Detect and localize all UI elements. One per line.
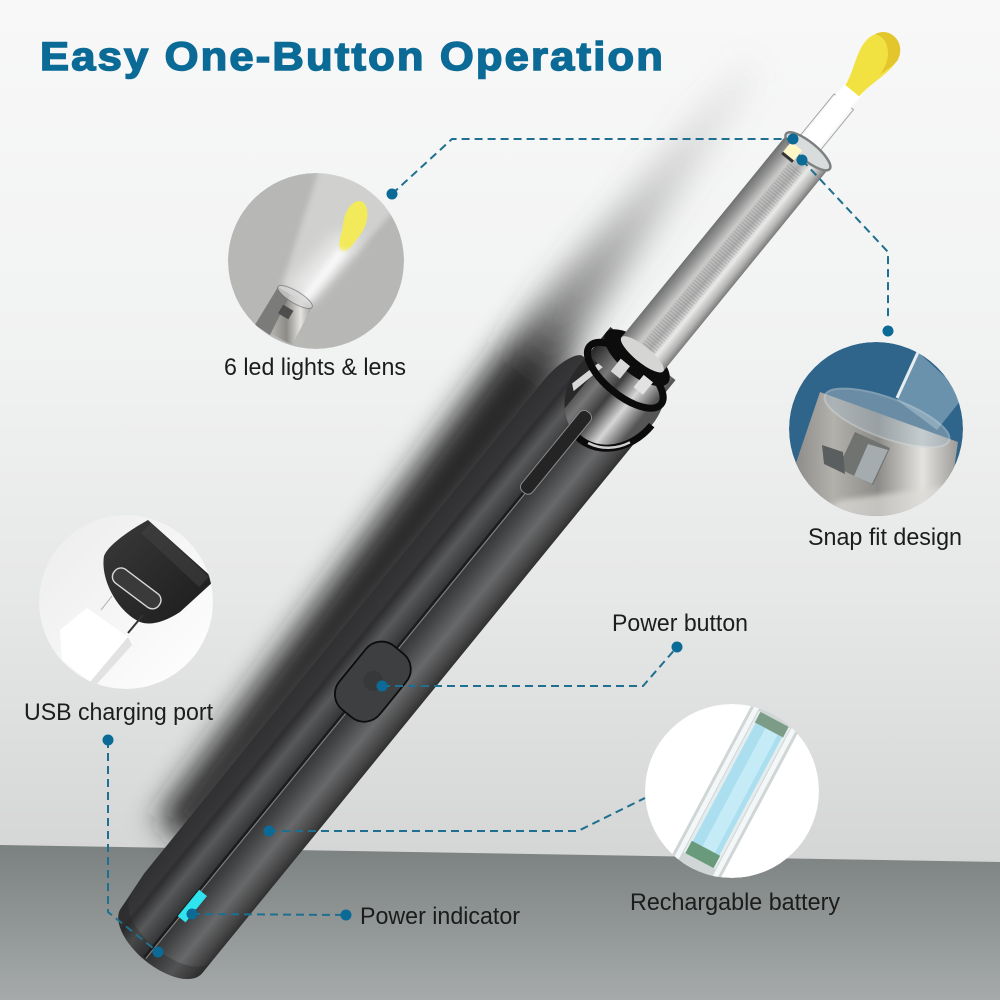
- circle: snap fit detail: [789, 342, 963, 516]
- callout: rechargeable battery: [264, 698, 840, 916]
- label: Rechargable battery: [630, 889, 840, 916]
- leader line: [376, 642, 682, 692]
- leader line: [386, 134, 798, 200]
- label: Power indicator: [360, 903, 520, 930]
- device: ear pick pen: [118, 32, 900, 979]
- callout: USB charging port: [24, 515, 215, 958]
- metal tube: [616, 127, 835, 378]
- label: 6 led lights & lens: [224, 354, 406, 381]
- power indicator light: [178, 890, 207, 922]
- circle: battery detail: [645, 698, 819, 882]
- callout: snap fit: [780, 154, 965, 551]
- leader line: [796, 154, 894, 336]
- power button: [327, 633, 419, 730]
- collar rings: [577, 317, 685, 420]
- yellow scoop: [836, 24, 908, 101]
- label: USB charging port: [24, 699, 213, 726]
- label: Snap fit design: [808, 524, 962, 551]
- leader line: [102, 734, 164, 958]
- callout: power button: [376, 610, 748, 692]
- circle: USB port detail: [39, 515, 215, 689]
- handle body: [100, 347, 656, 994]
- device shadow: [132, 55, 797, 846]
- ear scoop stem: [794, 78, 866, 159]
- label: Power button: [612, 610, 748, 637]
- yellow scoop: [339, 201, 367, 252]
- circle: led lens detail: [228, 173, 404, 349]
- body opening: [564, 358, 662, 452]
- callout: 6 led lights: [224, 134, 798, 381]
- leader line: [264, 798, 645, 836]
- leader line: [186, 908, 352, 920]
- callout: power indicator: [186, 903, 520, 930]
- title: Easy One-Button Operation: [40, 35, 665, 79]
- clip slot: [518, 408, 594, 497]
